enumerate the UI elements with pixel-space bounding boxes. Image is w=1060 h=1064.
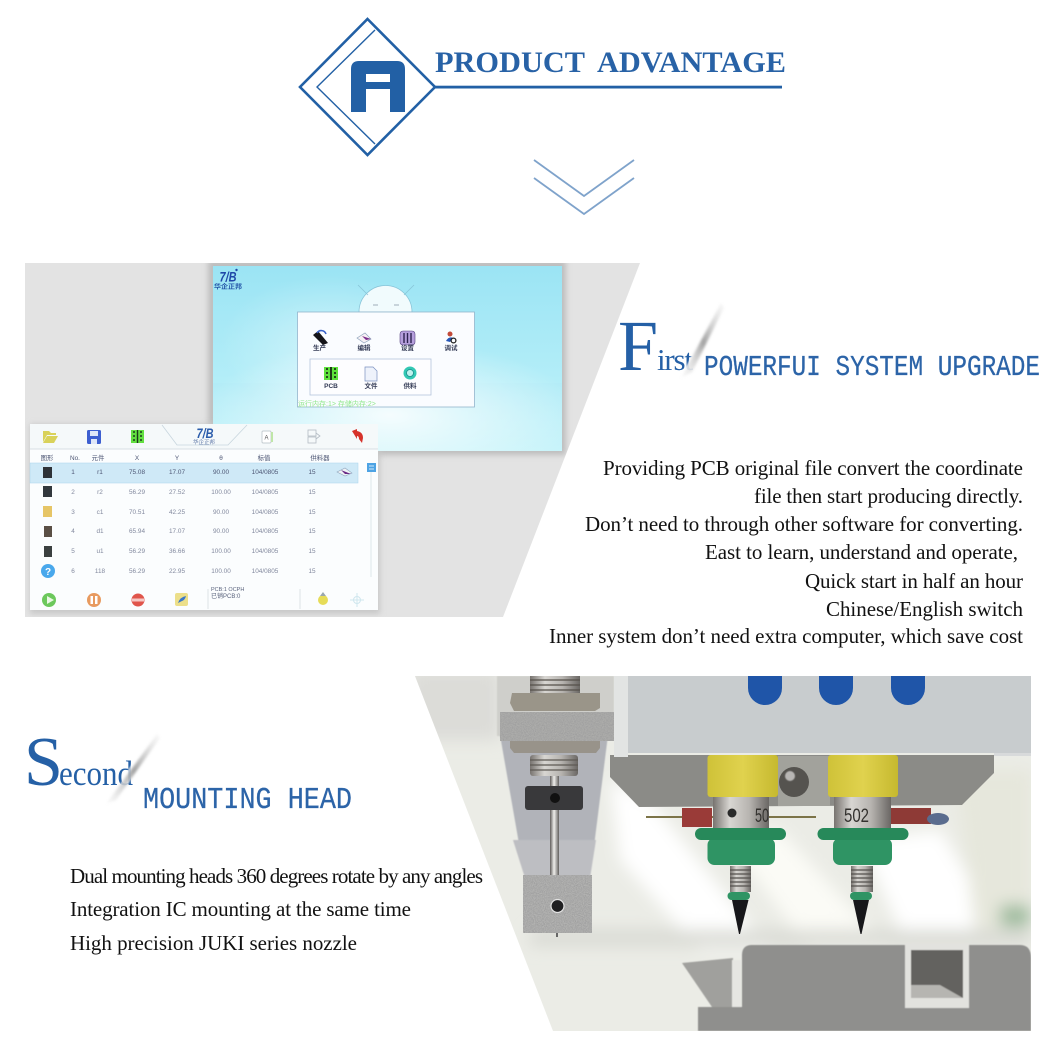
- speckled block: [500, 712, 614, 741]
- dialog: sub menu: [310, 359, 431, 395]
- heading: MOUNTING HEAD: MOUNTING HEAD: [143, 783, 352, 818]
- icon: company logo on screen: [214, 269, 243, 290]
- table rows: r1: [97, 469, 103, 476]
- table rows: 70.51: [129, 509, 145, 516]
- table rows: 56.29: [129, 548, 145, 555]
- toolbar logo tab: 华企正邦: [193, 438, 215, 446]
- table rows: 15: [308, 528, 316, 535]
- icon: settings: 设置: [401, 343, 414, 352]
- table rows: ?: [45, 567, 51, 578]
- upper nut: [510, 693, 600, 711]
- icon: feeder: 供料: [404, 381, 417, 390]
- text block: system features: Quick start in half an hour: [805, 569, 1023, 593]
- memory status text: 运行内存:1> 存储内存:2>: [298, 399, 376, 408]
- icon: PCB green: [131, 430, 144, 443]
- table rows: 118: [95, 568, 106, 575]
- table rows: 75.08: [129, 469, 145, 476]
- table rows: 3: [71, 509, 75, 516]
- table toolbar: [30, 424, 378, 449]
- icon: play: [42, 593, 56, 607]
- table rows: 1: [71, 469, 75, 476]
- table header row: 图形: [41, 454, 54, 462]
- table header row: θ: [219, 455, 223, 462]
- icon: settings: [400, 331, 415, 352]
- blurred background bands: [410, 670, 1031, 950]
- section heading: First: [618, 303, 1040, 386]
- icon: production: [313, 331, 328, 352]
- table rows: 17.07: [169, 469, 185, 476]
- decorative slash shadow: second: [106, 734, 160, 804]
- heading underline: [435, 86, 782, 88]
- table rows: 22.95: [169, 568, 185, 575]
- grey frame foreground: [682, 943, 1031, 1031]
- table rows: 100.00: [211, 548, 231, 555]
- text block: system features: Providing PCB original file convert the coordinate: [603, 456, 1023, 480]
- word: irst: irst: [657, 342, 693, 377]
- table rows: 15: [308, 548, 316, 555]
- table rows: 4: [71, 528, 75, 535]
- table rows: 15: [308, 509, 316, 516]
- icon: save disk: [87, 430, 101, 444]
- right nozzle: 502: [844, 806, 869, 827]
- text block: system features: Don’t need to through other software for converting.: [585, 512, 1023, 536]
- icon: A tool: [262, 431, 272, 443]
- circuit board and wire: [646, 808, 949, 827]
- icon: diamond A logo: [300, 19, 435, 155]
- table header row: [41, 453, 330, 462]
- word: econd: econd: [59, 754, 133, 793]
- table rows: 5: [71, 548, 75, 555]
- table rows: c1: [97, 509, 104, 516]
- text block: system features: [549, 456, 1024, 648]
- slash mask over the last letter: [118, 756, 144, 788]
- scrollbar: [367, 463, 376, 577]
- slash mask over the last letter: [684, 340, 706, 372]
- table rows: 104/0805: [252, 509, 279, 516]
- table header row: 元件: [92, 453, 105, 462]
- table rows: 6: [71, 568, 75, 575]
- table rows: r2: [97, 489, 103, 496]
- toolbar logo tab: 7/B: [196, 425, 214, 441]
- steel ball bolt: [778, 756, 830, 806]
- big letter F: F: [618, 306, 658, 386]
- table rows: 104/0805: [252, 528, 279, 535]
- icon: edit: 编辑: [358, 343, 371, 352]
- text block: system features: East to learn, understand and operate,: [705, 540, 1018, 564]
- table header row: Y: [175, 455, 180, 462]
- heading text: PRODUCT ADVANTAGE: [435, 46, 786, 79]
- left nozzle: 50: [755, 806, 769, 827]
- icon: stop: [132, 594, 144, 606]
- photo: mounting head nozzles: [410, 670, 1031, 1031]
- table rows: 104/0805: [252, 489, 279, 496]
- icon: A tool: A: [264, 436, 269, 442]
- mounting bracket plate: [497, 676, 614, 878]
- threaded stud lower: [530, 755, 578, 776]
- table rows: 56.29: [129, 568, 145, 575]
- table rows: 27.52: [169, 489, 185, 496]
- table rows: 100.00: [211, 568, 231, 575]
- text block: mounting head features: Integration IC mounting at the same time: [70, 897, 411, 921]
- selected row highlight: [30, 463, 358, 483]
- rod: [550, 776, 559, 876]
- table rows: 15: [308, 469, 316, 476]
- PCB status text: [208, 587, 300, 609]
- icon: company logo on screen: 华企正邦: [214, 282, 243, 290]
- dark collar: [525, 786, 583, 810]
- icon: back arrow: [352, 429, 363, 443]
- table rows: 2: [71, 489, 75, 496]
- text block: system features: Chinese/English switch: [826, 597, 1024, 621]
- icon: edit: [357, 333, 371, 352]
- text block: mounting head features: High precision JUKI series nozzle: [70, 931, 357, 955]
- right nozzle: [818, 755, 908, 934]
- table rows: 15: [308, 568, 316, 575]
- heading text: PRODUCT ADVANTAGE: PRODUCT: [435, 46, 585, 79]
- section heading: Second: [24, 724, 352, 818]
- table rows: 100.00: [211, 489, 231, 496]
- icon: pause: [87, 593, 101, 607]
- icon: company logo on screen: 7/B: [220, 270, 237, 284]
- photo background: [415, 676, 1031, 1031]
- table header row: No.: [70, 455, 80, 462]
- icon: debug: [444, 332, 458, 352]
- table rows: d1: [96, 528, 104, 535]
- icon: tool: [175, 593, 188, 606]
- table rows: 104/0805: [252, 568, 279, 575]
- screen: component table: [30, 424, 378, 610]
- heading text: PRODUCT ADVANTAGE: ADVANTAGE: [597, 46, 786, 79]
- table header row: 标值: [258, 453, 271, 462]
- table rows: 104/0805: [252, 469, 279, 476]
- icon: debug: 调试: [444, 343, 458, 352]
- table rows: 36.66: [169, 548, 185, 555]
- icon: open folder: [43, 431, 58, 443]
- bottom speckled block: [523, 875, 592, 937]
- table rows: 104/0805: [252, 548, 279, 555]
- table rows: 15: [308, 489, 316, 496]
- table rows: 90.00: [213, 469, 229, 476]
- table rows: 42.25: [169, 509, 185, 516]
- table rows: u1: [96, 548, 104, 555]
- screen: main menu: [213, 266, 562, 451]
- text block: system features: file then start producing directly.: [754, 484, 1023, 508]
- PCB status text: 已销PCB:0: [211, 592, 241, 600]
- table rows: 65.94: [129, 528, 145, 535]
- text block: mounting head features: [70, 864, 483, 955]
- table header row: 供料器: [310, 453, 330, 462]
- panel: grey slanted background: [25, 260, 640, 617]
- icon: switch tool: [308, 430, 320, 443]
- toolbar logo tab: [162, 425, 247, 446]
- icon: production: 生产: [313, 343, 326, 352]
- left nozzle: [695, 755, 786, 934]
- table rows: 90.00: [213, 528, 229, 535]
- table rows: 56.29: [129, 489, 145, 496]
- grey housing with blue slots: [610, 676, 1031, 807]
- icon: double chevron arrow: [534, 160, 634, 214]
- dialog: menu box: [298, 312, 474, 408]
- decorative slash shadow: first: [681, 303, 724, 378]
- blue slots: [748, 676, 925, 705]
- icon: PCB: PCB: [324, 383, 338, 390]
- big letter S: S: [24, 724, 63, 801]
- text block: system features: Inner system don’t need extra computer, which save cost: [549, 624, 1023, 648]
- text block: mounting head features: Dual mounting heads 360 degrees rotate by any angles: [70, 864, 483, 888]
- threaded stud top: [530, 676, 580, 693]
- icon: android mascot head: [358, 285, 414, 312]
- section header: product advantage: [300, 19, 786, 155]
- lower nut: [510, 741, 600, 753]
- PCB status text: PCB:1 OCPH: [211, 587, 244, 593]
- icon: crosshair: [350, 593, 364, 607]
- table rows: 17.07: [169, 528, 185, 535]
- icon: bulb: [318, 592, 328, 605]
- table rows: 90.00: [213, 509, 229, 516]
- icon: file: 文件: [364, 381, 378, 390]
- table header row: X: [135, 455, 140, 462]
- table rows: [41, 467, 352, 578]
- bottom control bar: [42, 587, 364, 609]
